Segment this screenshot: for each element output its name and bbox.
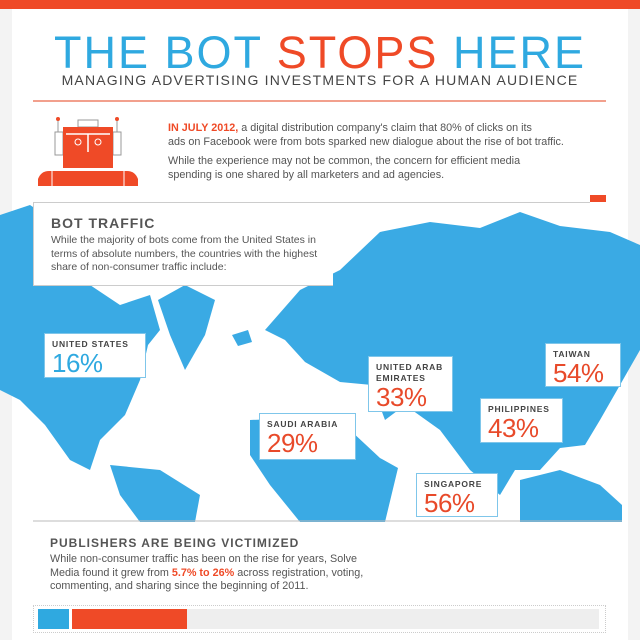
intro text: ads on Facebook were from bots sparked new dialogue about the rise of bot traffic. [168, 136, 564, 148]
callout: philippines: PHILIPPINES [488, 404, 550, 414]
callout: uae [368, 356, 453, 412]
subtitle: MANAGING ADVERTISING INVESTMENTS FOR A HUMAN AUDIENCE [62, 72, 578, 88]
callout: saudi arabia: SAUDI ARABIA [267, 419, 338, 429]
callout: saudi arabia: 29% [267, 428, 318, 458]
intro text: IN JULY 2012, a digital distribution company's claim that 80% of clicks on its [168, 122, 532, 134]
divider [33, 100, 606, 102]
text: publishers: commenting, and sharing since the beginning of 2011. [50, 580, 308, 592]
icon: robot [38, 117, 138, 186]
callout: singapore: 56% [424, 488, 475, 518]
intro text [168, 122, 564, 181]
callout: united states: UNITED STATES [52, 339, 129, 349]
text: bot traffic: share of non-consumer traffic include: [51, 261, 226, 273]
callout: taiwan: 54% [553, 358, 604, 388]
text: bot traffic [51, 234, 318, 273]
orange marker [590, 195, 606, 202]
world map [0, 205, 640, 522]
text: publishers: While non-consumer traffic has been on the rise for years, Solve [50, 553, 357, 565]
callout: singapore [416, 473, 498, 517]
intro text: spending is one shared by all marketers and ad agencies. [168, 169, 444, 181]
callout: united states: 16% [52, 348, 103, 378]
callout: uae: 33% [376, 382, 427, 412]
heading: bot traffic: BOT TRAFFIC [51, 215, 155, 231]
callout: philippines: 43% [488, 413, 539, 443]
callout: uae: UNITED ARAB [376, 362, 443, 372]
callout: uae: EMIRATES [376, 373, 426, 383]
intro text: While the experience may not be common, the concern for efficient media [168, 155, 520, 167]
callout: philippines [480, 398, 563, 443]
callout: taiwan: TAIWAN [553, 349, 591, 359]
callout: singapore: SINGAPORE [424, 479, 482, 489]
callout: taiwan [545, 343, 621, 387]
text: bot traffic: While the majority of bots come from the United States in [51, 234, 316, 246]
text: publishers: Media found it grew from 5.7% to 26% across registration, voting, [50, 566, 363, 578]
callout: saudi arabia [259, 413, 356, 460]
top bar [0, 0, 640, 9]
title: THE BOT STOPS HERE [54, 27, 586, 78]
heading: publishers: PUBLISHERS ARE BEING VICTIMIZED [50, 536, 299, 550]
callout: united states [44, 333, 146, 378]
text: publishers [50, 553, 363, 592]
panel: bot traffic [33, 202, 333, 286]
text: bot traffic: terms of absolute numbers, the countries with the highest [51, 248, 317, 260]
bar chart [33, 605, 606, 633]
